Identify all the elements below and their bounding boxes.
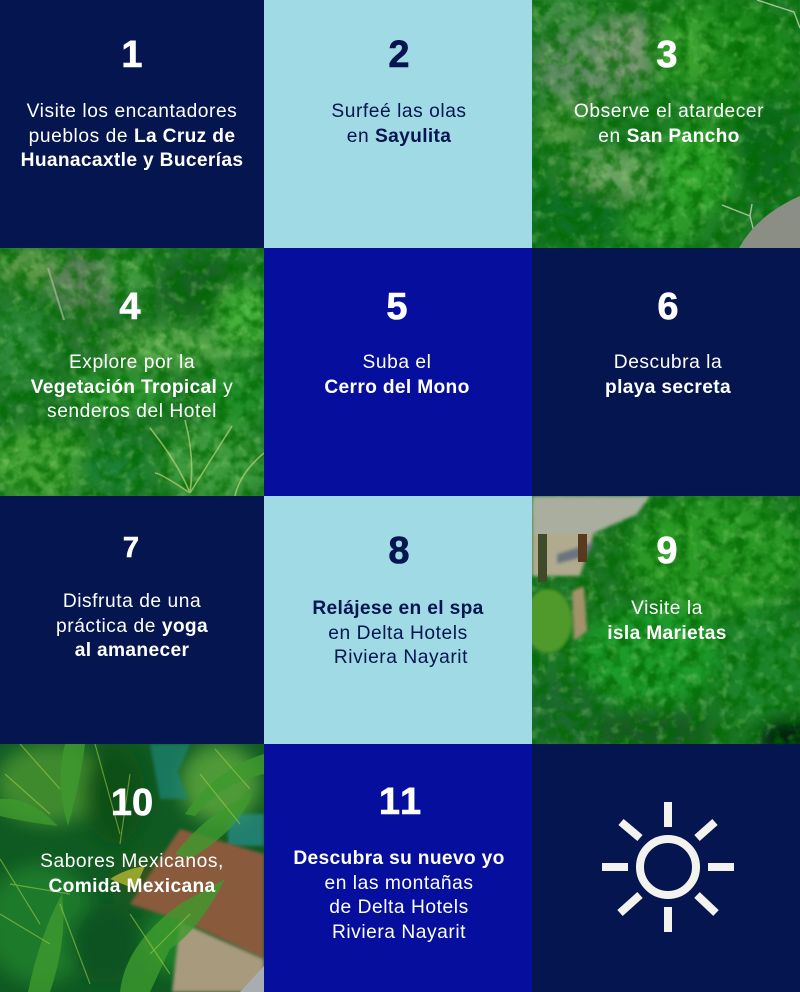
text block 3: en San Pancho bbox=[598, 126, 740, 146]
text block 11: de Delta Hotels bbox=[329, 897, 469, 918]
text block 1: Visite los encantadores bbox=[27, 101, 237, 122]
text block 2 bbox=[331, 101, 467, 146]
number 1: 1 bbox=[121, 34, 143, 76]
text block 5 bbox=[324, 352, 470, 398]
text block 11: Riviera Nayarit bbox=[332, 922, 466, 942]
text block 3: Observe el atardecer bbox=[574, 101, 764, 122]
text block 2: en Sayulita bbox=[347, 126, 451, 146]
text block 8: en Delta Hotels bbox=[328, 622, 468, 644]
text block 8 bbox=[312, 598, 484, 668]
number 5: 5 bbox=[386, 286, 408, 328]
panel 12: sun icon bbox=[532, 744, 800, 992]
text block 5: Suba el bbox=[363, 352, 431, 373]
text block 7: Disfruta de una bbox=[63, 591, 201, 612]
photo: foliage and terrace bbox=[532, 496, 800, 744]
text block 4 bbox=[30, 352, 233, 422]
text block 7: al amanecer bbox=[75, 640, 189, 661]
panel 11: nuevo yo bbox=[264, 744, 532, 992]
photo: palm fronds bbox=[0, 744, 264, 992]
panel 8: spa bbox=[264, 496, 532, 744]
panel 9: isla Marietas photo bbox=[532, 496, 800, 744]
panel 3: San Pancho photo bbox=[532, 0, 800, 248]
text block 11: Descubra su nuevo yo bbox=[293, 848, 505, 869]
number 2: 2 bbox=[388, 34, 410, 76]
text block 6: playa secreta bbox=[605, 376, 731, 398]
text block 9: isla Marietas bbox=[607, 622, 727, 644]
text block 9 bbox=[607, 598, 727, 644]
number 7: 7 bbox=[123, 532, 139, 564]
photo: tropical vegetation bbox=[0, 248, 264, 496]
panel 2: Sayulita bbox=[264, 0, 532, 248]
text block 11: en las montañas bbox=[324, 872, 474, 894]
text block 6 bbox=[605, 352, 731, 398]
text block 1 bbox=[21, 101, 243, 171]
text block 10: Comida Mexicana bbox=[48, 876, 216, 896]
text block 9: Visite la bbox=[631, 598, 703, 619]
photo: jungle hillside bbox=[532, 0, 800, 248]
number 10: 10 bbox=[111, 782, 153, 824]
text block 4: Explore por la bbox=[69, 352, 195, 373]
panel 7: yoga bbox=[0, 496, 264, 744]
text block 4: Vegetación Tropical y bbox=[31, 376, 233, 398]
text block 10: Sabores Mexicanos, bbox=[40, 851, 224, 872]
text block 7 bbox=[56, 591, 208, 661]
text block 2: Surfeé las olas bbox=[331, 101, 467, 122]
panel 5: Cerro del Mono bbox=[264, 248, 532, 496]
number 4: 4 bbox=[119, 286, 141, 328]
text block 6: Descubra la bbox=[614, 352, 722, 373]
text block 1: Huanacaxtle y Bucerías bbox=[21, 150, 243, 171]
text block 4: senderos del Hotel bbox=[47, 401, 217, 422]
number 3: 3 bbox=[656, 34, 678, 76]
number 9: 9 bbox=[656, 530, 678, 572]
number 8: 8 bbox=[388, 530, 410, 572]
text block 11 bbox=[293, 848, 505, 942]
panel 4: vegetación photo bbox=[0, 248, 264, 496]
panel 10: comida photo bbox=[0, 744, 264, 992]
text block 1: pueblos de La Cruz de bbox=[29, 126, 235, 146]
number 11: 11 bbox=[379, 781, 423, 823]
text block 7: práctica de yoga bbox=[56, 616, 208, 636]
text block 3 bbox=[574, 101, 764, 146]
text block 5: Cerro del Mono bbox=[324, 376, 470, 398]
text block 10 bbox=[40, 851, 224, 896]
text block 8: Riviera Nayarit bbox=[334, 647, 468, 668]
icon: sun bbox=[602, 802, 734, 932]
text block 8: Relájese en el spa bbox=[312, 598, 484, 619]
panel 1: pueblos bbox=[0, 0, 264, 248]
panel 6: playa secreta bbox=[532, 248, 800, 496]
number 6: 6 bbox=[657, 286, 679, 328]
